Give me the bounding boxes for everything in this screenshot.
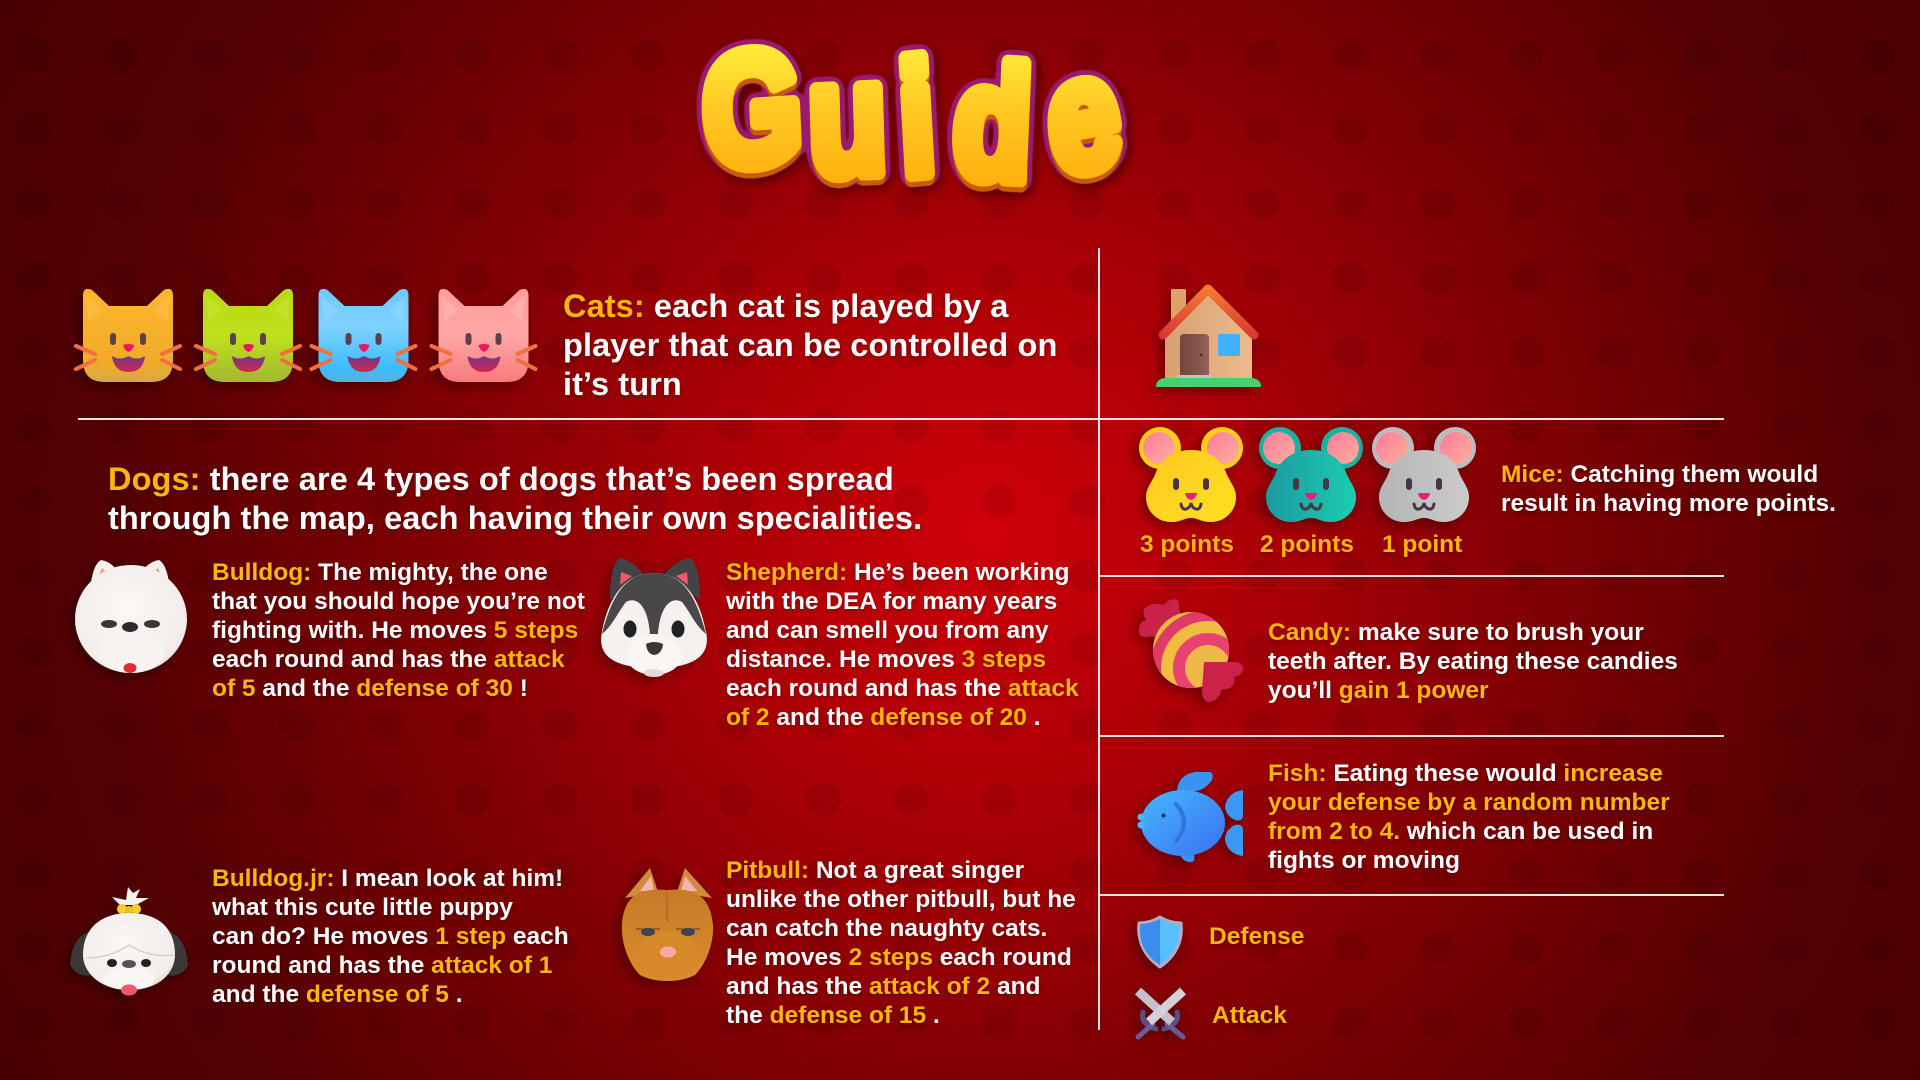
text: shepherd: Shepherd: He’s been working [726,559,1070,586]
text: shepherd: and can smell you from any [726,617,1049,644]
text: bulldog jr: what this cute little puppy [212,894,513,921]
text: bulldog jr: round and has the attack of 1 [212,952,552,979]
text: mice: Mice: Catching them would [1501,461,1818,488]
text: dogs heading [108,461,922,540]
text: shepherd: with the DEA for many years [726,588,1057,615]
label: 1 point: 1 point [1382,531,1462,558]
text: shepherd: of 2 and the defense of 20 . [726,704,1041,731]
text: mice [1501,461,1836,519]
text: bulldog [212,559,586,702]
icon: pitbull head [622,868,713,981]
text: shepherd: each round and has the attack [726,675,1079,702]
text: shepherd: distance. He moves 3 steps [726,646,1046,673]
icon: teal mouse [1259,427,1363,522]
text: bulldog: each round and has the attack [212,646,565,673]
text: bulldog: fighting with. He moves 5 steps [212,617,578,644]
text: fish: Fish: Eating these would increase [1268,760,1663,787]
text: cats description: player that can be controlled on [563,327,1057,363]
icon: bulldog jr head [70,887,188,996]
text: pitbull: can catch the naughty cats. [726,915,1047,942]
text: candy [1267,619,1678,706]
text: bulldog jr: and the defense of 5 . [212,981,463,1008]
icon: candy [1130,598,1244,711]
icon: fish [1138,772,1243,862]
text: bulldog jr: Bulldog.jr: I mean look at him! [212,865,563,892]
text: fish: your defense by a random number [1268,789,1670,816]
text: candy: Candy: make sure to brush your [1268,619,1644,646]
label: attack: Attack [1212,1002,1287,1029]
icon: pink cat [432,289,536,382]
icon: bulldog head [75,560,187,673]
icon: green cat [196,289,300,382]
text: shepherd [724,559,1079,731]
text: fish: from 2 to 4. which can be used in [1268,818,1653,845]
icon: shield [1139,917,1181,967]
text: fish [1268,760,1670,876]
icons layer [64,284,1477,1044]
text: pitbull: the defense of 15 . [726,1002,940,1029]
title: Guide: Guide [699,16,1128,214]
text: cats description [562,288,1058,402]
icon: crossed swords [1138,991,1183,1037]
text: fish: fights or moving [1268,847,1460,874]
text: dogs heading: through the map, each having their own specialities. [108,500,922,536]
text: bulldog jr: can do? He moves 1 step each [212,923,569,950]
text: candy: you’ll gain 1 power [1268,677,1489,704]
text: pitbull: and has the attack of 2 and [726,973,1041,1000]
text: cats description: Cats: each cat is played by a [563,288,1008,324]
text: pitbull: unlike the other pitbull, but he [726,886,1076,913]
text: pitbull: He moves 2 steps each round [726,944,1072,971]
icon: grey mouse [1372,427,1476,522]
label: 3 points: 3 points [1140,531,1234,558]
icon: yellow mouse [1139,427,1243,522]
text: cats description: it’s turn [563,366,682,402]
divider lines [78,248,1724,1030]
text: mice: result in having more points. [1501,490,1836,517]
text: pitbull: Pitbull: Not a great singer [726,857,1024,884]
label: defense: Defense [1209,923,1304,950]
icon: blue cat [312,289,416,382]
icon: orange cat [76,289,180,382]
text: dogs heading: Dogs: there are 4 types of dogs that’s been spread [108,461,894,497]
icon: shepherd head [601,558,707,677]
text: bulldog: that you should hope you’re not [212,588,585,615]
label: 2 points: 2 points [1260,531,1354,558]
icon: house [1156,289,1261,387]
text: bulldog: of 5 and the defense of 30 ! [212,675,528,702]
text: bulldog jr [212,865,569,1008]
text: pitbull [726,857,1076,1029]
text: candy: teeth after. By eating these candies [1268,648,1678,675]
text: bulldog: Bulldog: The mighty, the one [212,559,548,586]
